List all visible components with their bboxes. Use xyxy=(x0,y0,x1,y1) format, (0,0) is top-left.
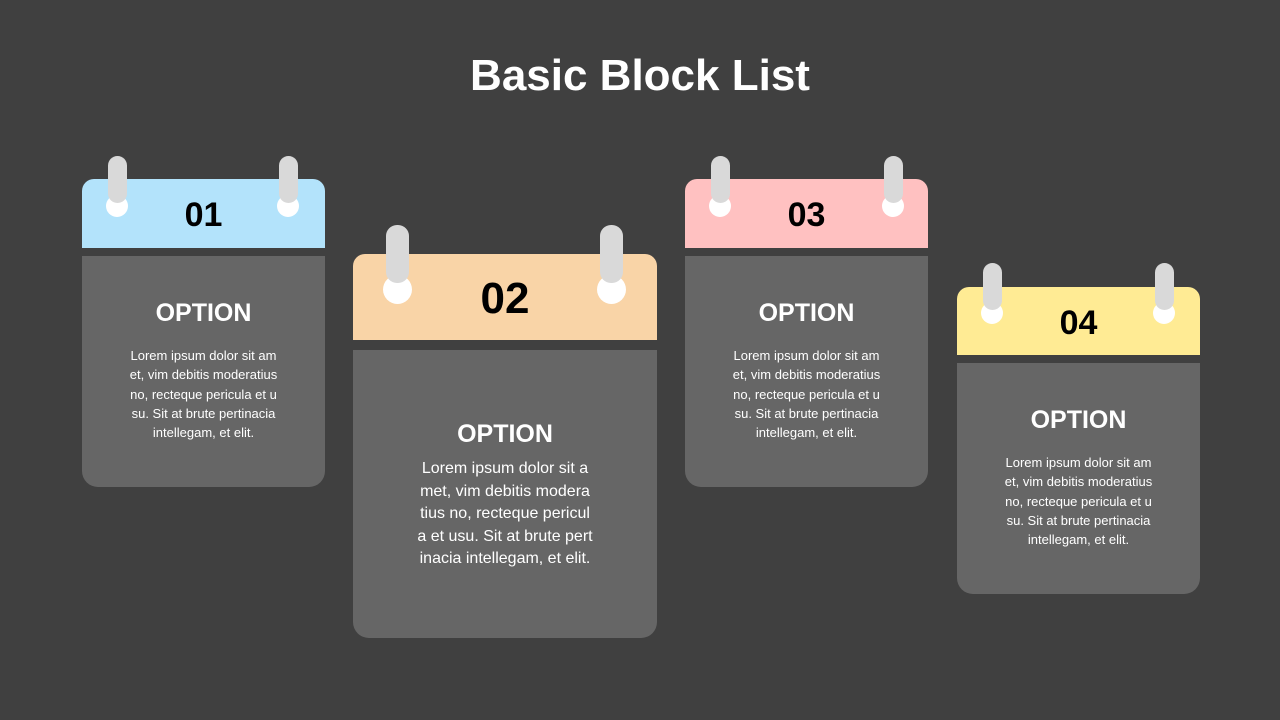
body 04 xyxy=(957,363,1200,594)
body 03 xyxy=(685,256,928,487)
ring left xyxy=(981,302,1003,324)
header 03: 03 xyxy=(788,196,825,234)
ring left xyxy=(106,195,128,217)
text: Lorem ipsum dolor sit am xyxy=(734,348,879,363)
card 02 xyxy=(353,225,657,638)
pin right xyxy=(600,225,623,283)
option heading: OPTION xyxy=(1031,406,1126,434)
text: su. Sit at brute pertinacia xyxy=(132,406,275,421)
text: intellegam, et elit. xyxy=(1028,532,1129,547)
header 03 xyxy=(685,179,928,248)
text: intellegam, et elit. xyxy=(153,425,254,440)
pin left xyxy=(386,225,409,283)
text xyxy=(733,348,880,440)
text xyxy=(417,460,593,567)
option heading: OPTION xyxy=(156,299,251,327)
ring right xyxy=(597,275,626,304)
text: tius no, recteque pericul xyxy=(420,505,590,522)
option heading: OPTION xyxy=(457,420,553,448)
title: Basic Block List xyxy=(470,51,810,100)
pin right xyxy=(884,156,903,203)
header 01 xyxy=(82,179,325,248)
header 04: 04 xyxy=(1060,304,1097,342)
ring right xyxy=(277,195,299,217)
card 04 xyxy=(957,263,1200,594)
ring left xyxy=(383,275,412,304)
text: inacia intellegam, et elit. xyxy=(420,550,590,567)
header 02: 02 xyxy=(481,274,529,323)
text: et, vim debitis moderatius xyxy=(1005,474,1152,489)
text: su. Sit at brute pertinacia xyxy=(735,406,878,421)
header 04 xyxy=(957,287,1200,355)
text xyxy=(1005,455,1152,547)
text: met, vim debitis modera xyxy=(420,482,590,500)
pin left xyxy=(983,263,1002,310)
option heading: OPTION xyxy=(759,299,854,327)
text: et, vim debitis moderatius xyxy=(733,367,880,382)
header 01: 01 xyxy=(185,196,222,234)
header 02 xyxy=(353,254,657,340)
card 03 xyxy=(685,156,928,487)
text: a et usu. Sit at brute pert xyxy=(417,528,593,544)
text: su. Sit at brute pertinacia xyxy=(1007,513,1150,528)
card 01 xyxy=(82,156,325,487)
text: no, recteque pericula et u xyxy=(1005,494,1152,509)
text: no, recteque pericula et u xyxy=(130,387,277,402)
ring right xyxy=(882,195,904,217)
text: no, recteque pericula et u xyxy=(733,387,880,402)
ring right xyxy=(1153,302,1175,324)
pin left xyxy=(711,156,730,203)
text: intellegam, et elit. xyxy=(756,425,857,440)
text: et, vim debitis moderatius xyxy=(130,367,277,382)
text xyxy=(130,348,277,440)
text: Lorem ipsum dolor sit am xyxy=(1006,455,1151,470)
pin right xyxy=(279,156,298,203)
pin right xyxy=(1155,263,1174,310)
pin left xyxy=(108,156,127,203)
body 02 xyxy=(353,350,657,638)
text: Lorem ipsum dolor sit am xyxy=(131,348,276,363)
text: Lorem ipsum dolor sit a xyxy=(422,460,588,477)
ring left xyxy=(709,195,731,217)
body 01 xyxy=(82,256,325,487)
